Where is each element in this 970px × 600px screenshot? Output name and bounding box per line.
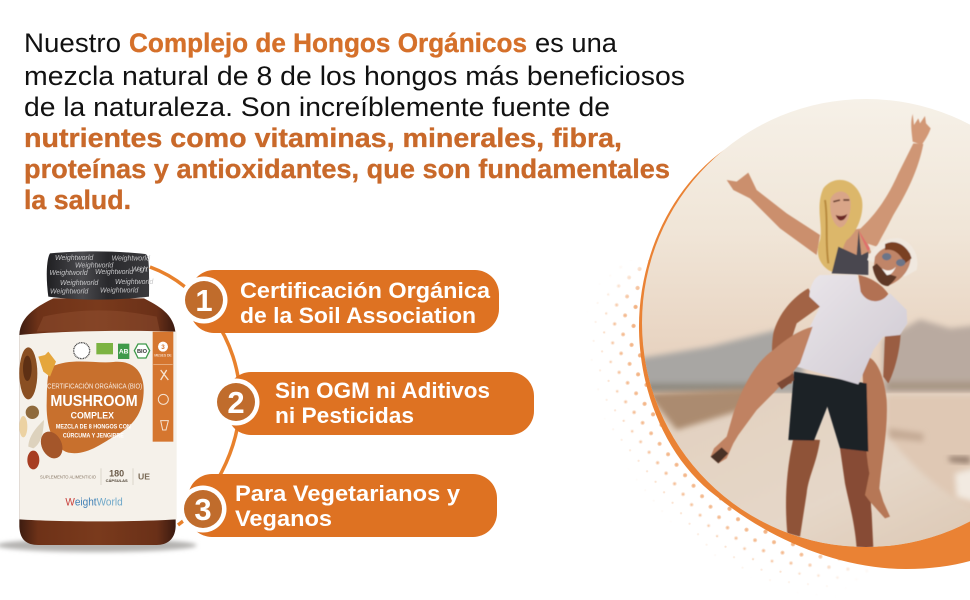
blob text: MEZCLA DE 8 HONGOS CON <box>56 425 131 431</box>
certification logos: BIO <box>137 349 148 355</box>
pill 3: Veganos <box>235 506 332 531</box>
side band: MESES DE <box>154 354 172 358</box>
t-shirt <box>797 275 907 384</box>
badge 2: 2 <box>227 385 245 420</box>
heading paragraph: proteínas y antioxidantes, que son fundamentales <box>24 154 670 184</box>
blob text: CERTIFICACIÓN ORGÁNICA (BIO) <box>47 382 142 391</box>
supplement info: 180 <box>109 469 124 479</box>
side band <box>153 332 173 442</box>
cap branding: Weightworld <box>100 288 139 295</box>
supplement info <box>40 468 150 485</box>
man's head and hat <box>867 238 917 277</box>
supplement info: CÁPSULAS <box>106 478 128 483</box>
cap branding: Weightworld <box>112 256 151 263</box>
pill 1: Certificación Orgánica <box>240 278 491 303</box>
pill 1 <box>180 270 499 333</box>
bottle shadow <box>0 539 197 552</box>
blob text: CÚRCUMA Y JENGIBRE <box>63 432 124 439</box>
orange blob <box>47 362 144 453</box>
blob text: MUSHROOM <box>50 393 138 410</box>
heading paragraph: nutrientes como vitaminas, minerales, fibra, <box>24 123 622 153</box>
certification logos <box>74 343 150 359</box>
ingredients <box>19 347 67 469</box>
cap branding: Weightworld <box>75 262 114 269</box>
heading paragraph <box>24 28 685 215</box>
badge 1: 1 <box>195 283 213 318</box>
heading paragraph: de la naturaleza. Son increíblemente fuente de <box>24 92 610 122</box>
side band: 3 <box>161 344 165 351</box>
pill 3 <box>180 474 497 537</box>
figures <box>711 114 931 548</box>
shorts <box>788 372 868 452</box>
bottle <box>0 251 197 552</box>
cap branding: Weightworld <box>60 280 99 287</box>
label <box>19 331 177 521</box>
badge 2 <box>212 378 260 426</box>
cap branding: Weightworld <box>49 270 89 277</box>
hair <box>818 180 862 272</box>
heading paragraph: Nuestro <box>24 28 121 58</box>
woman's top <box>832 230 868 275</box>
cap <box>47 251 149 300</box>
cap branding: Weightworld <box>115 279 154 286</box>
mountains <box>630 319 970 393</box>
woman's front leg <box>711 327 813 463</box>
bottle glass body <box>19 298 176 545</box>
pill 2 <box>212 372 534 435</box>
cap branding <box>49 255 154 295</box>
badge 3: 3 <box>194 492 212 527</box>
supplement info: UE <box>138 472 150 482</box>
woman's chest <box>842 228 872 256</box>
woman's far arm raised <box>861 143 923 247</box>
hand on knee <box>777 373 794 389</box>
woman's face <box>830 192 851 227</box>
blob text: COMPLEX <box>71 410 114 420</box>
pill 2: ni Pesticidas <box>275 403 414 428</box>
pill 1: de la Soil Association <box>240 303 476 328</box>
woman's near arm <box>727 173 820 255</box>
woman's back leg <box>862 356 890 518</box>
halftone dots <box>592 260 868 587</box>
connector arc <box>150 267 240 525</box>
blob text <box>47 382 142 439</box>
beach <box>653 393 970 547</box>
heading paragraph: la salud. <box>24 185 131 215</box>
pill 3: Para Vegetarianos y <box>235 481 461 506</box>
man's arms <box>772 288 820 387</box>
supplement info: SUPLEMENTO ALIMENTICIO <box>40 475 96 481</box>
cap branding: Weight <box>132 267 149 274</box>
photo: couple on the beach <box>630 98 970 560</box>
brand logo: WeightWorld <box>65 497 123 509</box>
cap branding: Weightworld <box>95 269 134 276</box>
heading paragraph: es una <box>535 28 618 58</box>
pill 2: Sin OGM ni Aditivos <box>275 378 490 403</box>
badge 1 <box>180 276 228 324</box>
orange crescent behind photo <box>639 150 970 569</box>
cap branding: Weightworld <box>50 288 89 295</box>
heading paragraph: Complejo de Hongos Orgánicos <box>129 28 527 58</box>
man legs <box>786 438 820 537</box>
cap branding: Weightworld <box>55 255 94 262</box>
badge 3 <box>180 486 226 532</box>
certification logos: AB <box>119 348 129 355</box>
heading paragraph: mezcla natural de 8 de los hongos más beneficiosos <box>24 61 685 91</box>
man's neck <box>858 275 888 301</box>
